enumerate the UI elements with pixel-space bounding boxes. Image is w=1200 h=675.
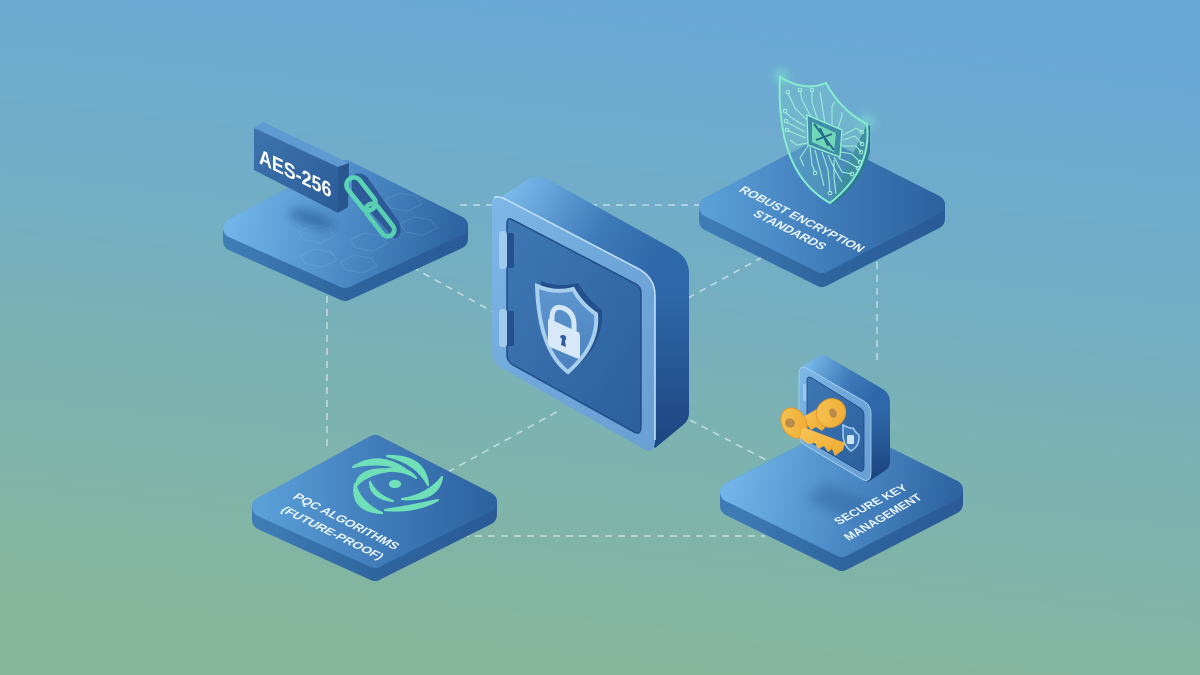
shield body — [780, 77, 868, 203]
small safe front — [799, 367, 871, 480]
block end face — [338, 163, 349, 213]
circuit traces — [785, 90, 862, 194]
key 2 blade and teeth — [801, 406, 828, 431]
safe door — [507, 219, 641, 433]
chip core — [812, 122, 836, 152]
hinge body — [499, 231, 507, 269]
shield depth — [830, 124, 870, 205]
keyhole — [560, 335, 566, 347]
icon: quantum swirl — [353, 456, 442, 513]
label line 2: STANDARDS — [750, 208, 830, 252]
padlock shackle — [552, 307, 574, 332]
key 1 blade — [800, 427, 845, 456]
icon: shield with padlock — [537, 281, 602, 373]
small safe door — [807, 377, 864, 471]
hinge lower — [499, 309, 514, 347]
swirl core — [390, 481, 400, 487]
hexagon pattern — [298, 193, 437, 273]
label line 2: (FUTURE-PROOF) — [278, 504, 387, 562]
chip — [807, 115, 842, 157]
platform: AES-256 — [233, 122, 458, 291]
icon: chain link — [343, 173, 401, 239]
platform side — [262, 445, 487, 571]
key 2 head — [811, 393, 851, 433]
label: secure key management — [831, 482, 925, 543]
block top face — [254, 122, 349, 167]
central safe — [492, 177, 689, 451]
block shadow — [287, 205, 337, 233]
label line 1: PQC ALGORITHMS — [290, 491, 403, 552]
upper link — [343, 174, 379, 214]
icon: gold keys — [776, 393, 851, 456]
key 1 head — [776, 403, 812, 443]
label line 1: ROBUST ENCRYPTION — [736, 184, 868, 255]
icon: small safe — [799, 356, 890, 482]
hinge shadow — [505, 311, 514, 346]
chip mark — [814, 124, 834, 150]
AES-256 label: AES-256 — [259, 146, 331, 203]
safe body shading — [496, 177, 689, 448]
label: PQC algorithms — [278, 491, 403, 562]
small safe body — [803, 356, 890, 482]
platform side — [709, 148, 935, 277]
lower link — [363, 201, 397, 239]
platform: PQC algorithms — [262, 445, 487, 571]
hinge shadow — [505, 233, 514, 268]
small safe lock — [847, 435, 854, 444]
shield depth — [540, 281, 602, 373]
AES block — [254, 122, 349, 213]
hinge upper — [499, 231, 514, 269]
dashed connector lines — [327, 205, 877, 536]
small safe shading — [803, 356, 890, 482]
platform side — [730, 435, 953, 561]
outer swooshes — [353, 459, 405, 469]
platform top — [262, 445, 487, 558]
block front face — [254, 128, 338, 213]
inner swooshes — [356, 469, 395, 486]
link shadow — [352, 173, 401, 239]
label: robust encryption standards — [736, 184, 868, 255]
label line 2: MANAGEMENT — [841, 491, 925, 543]
icon: circuit shield — [775, 70, 873, 205]
key 2 hole — [828, 407, 838, 419]
safe front highlight — [494, 197, 655, 440]
key 1 hole — [784, 417, 796, 429]
safe front frame — [492, 196, 655, 451]
padlock body — [548, 319, 580, 359]
platform: secure key management — [730, 356, 953, 561]
shield glow — [775, 70, 873, 128]
circuit nodes — [783, 88, 864, 195]
platform top — [709, 148, 935, 263]
safe body — [496, 177, 689, 448]
small safe shadow — [805, 482, 875, 520]
small safe shield — [843, 425, 859, 451]
platform: robust encryption standards — [709, 70, 935, 277]
platform side — [233, 170, 458, 291]
small safe hinge — [803, 384, 806, 401]
label line 1: SECURE KEY — [831, 482, 911, 527]
platform top — [730, 435, 953, 547]
platform top — [233, 170, 458, 278]
shield outer — [537, 286, 596, 372]
hinge body — [499, 309, 507, 347]
